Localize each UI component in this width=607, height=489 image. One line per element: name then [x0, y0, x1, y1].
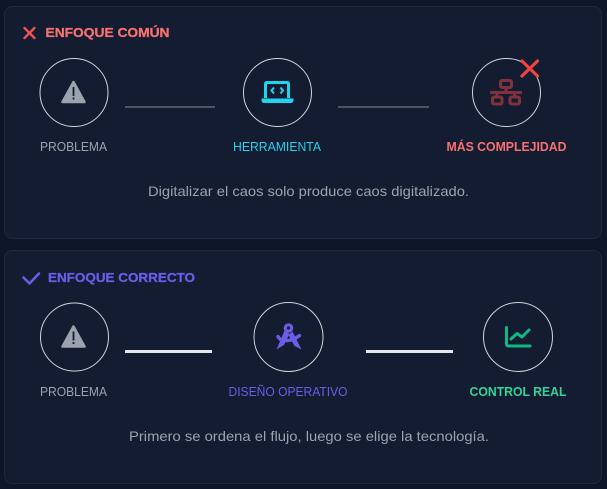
icon: warning — [62, 326, 84, 346]
icon: check — [24, 274, 39, 284]
icon: red cross — [24, 28, 34, 38]
icon: network — [490, 80, 522, 104]
label: más complejidad: MÁS COMPLEJIDAD — [446, 139, 566, 154]
label: herramienta: HERRAMIENTA — [233, 140, 322, 154]
connector — [366, 350, 453, 353]
label: problema: PROBLEMA — [40, 385, 108, 399]
icon: red cross badge — [522, 61, 538, 76]
step: problema — [40, 58, 108, 154]
step: diseño operativo — [228, 302, 348, 399]
icon: warning — [62, 82, 84, 102]
heading: enfoque común: ENFOQUE COMÚN — [46, 25, 170, 40]
icon: laptop with code — [262, 82, 294, 103]
caption: Primero se ordena el flujo, luego se elige la tecnología. — [129, 428, 489, 444]
icon: line chart — [506, 328, 530, 346]
connector — [125, 106, 215, 108]
connector — [125, 350, 212, 353]
panel: enfoque común — [4, 6, 602, 238]
label: control real: CONTROL REAL — [470, 385, 567, 399]
step: herramienta — [233, 58, 322, 154]
label: problema: PROBLEMA — [40, 140, 108, 154]
label: diseño operativo: DISEÑO OPERATIVO — [228, 385, 348, 399]
heading: enfoque correcto: ENFOQUE CORRECTO — [48, 270, 195, 285]
step: problema — [40, 303, 108, 399]
icon: drafting compass — [276, 325, 302, 350]
panel: enfoque correcto — [4, 250, 602, 484]
step: control real — [470, 302, 567, 399]
caption: Digitalizar el caos solo produce caos digitalizado. — [148, 183, 469, 199]
step: más complejidad — [446, 58, 566, 154]
connector — [338, 106, 429, 108]
